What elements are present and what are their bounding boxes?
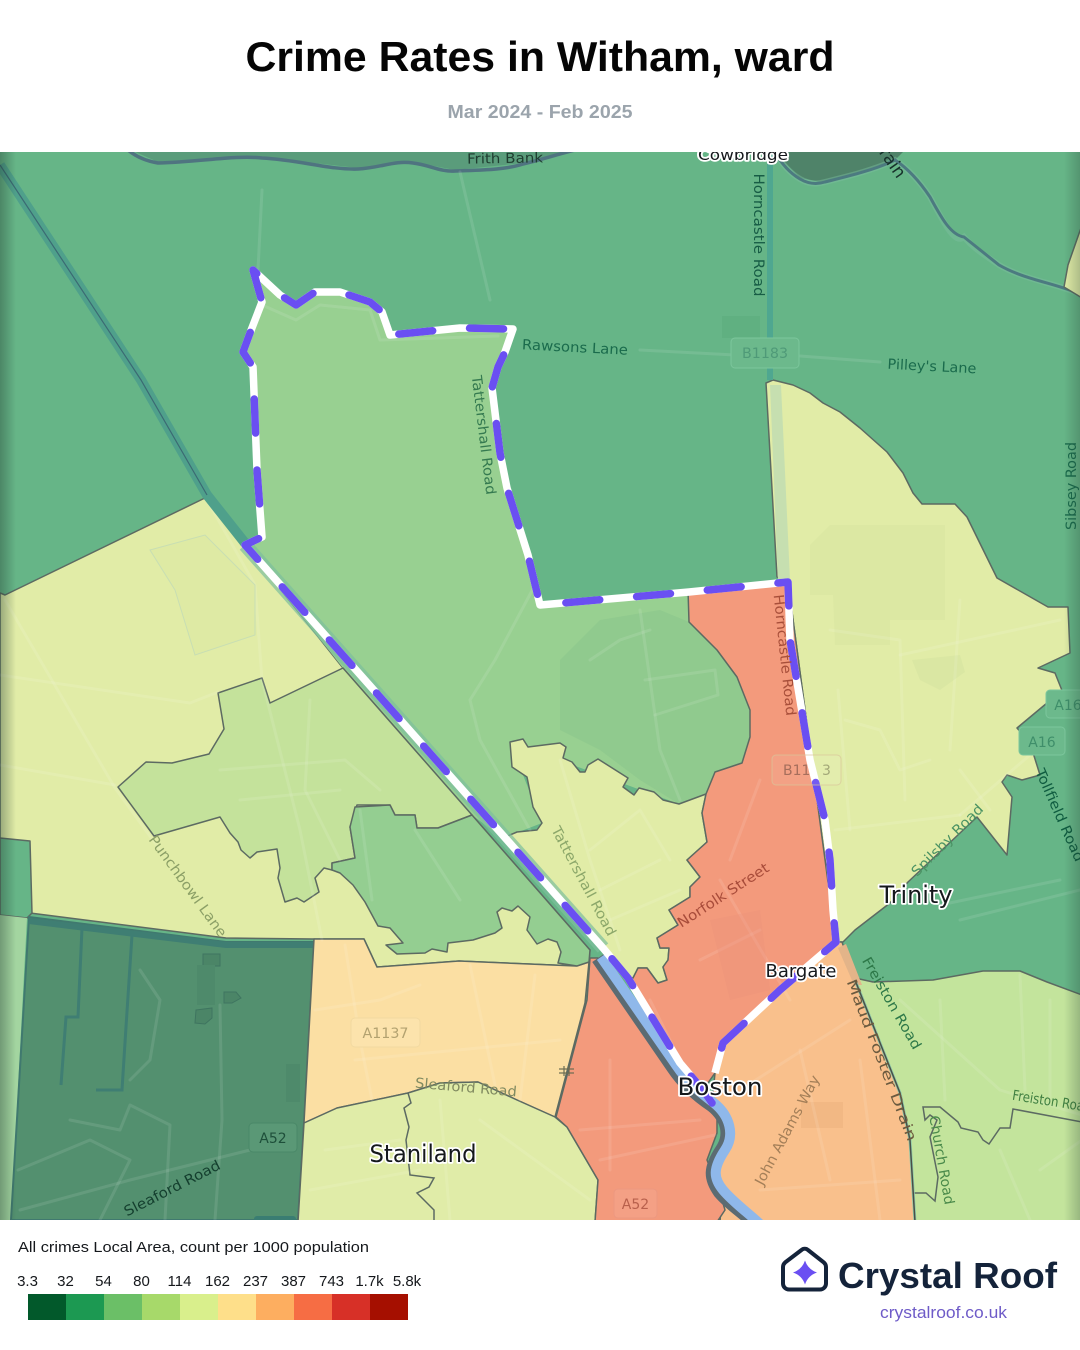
shield: A16 partial xyxy=(1046,690,1080,718)
icon: crystal roof house logo xyxy=(783,1249,826,1290)
label: Sleaford Road dark: Sleaford Road xyxy=(122,1158,223,1220)
area: east yellow Trinity zone xyxy=(766,380,1070,942)
road labels xyxy=(122,144,1080,1220)
shield: A1137 xyxy=(351,1018,420,1047)
area: far-left light green strip xyxy=(0,915,27,1220)
brand block xyxy=(783,1249,1058,1322)
river Witham xyxy=(598,957,760,1226)
area: west green box xyxy=(0,838,32,918)
label: Maud Foster Drain: Maud Foster Drain xyxy=(843,977,919,1144)
shield: B1183 north xyxy=(731,338,799,368)
place label: Bargate: Bargate xyxy=(766,961,836,982)
label: Freiston Road: Freiston Road xyxy=(858,954,924,1053)
area: lowest-crime dark green zone xyxy=(11,917,314,1222)
label: Church Road: Church Road xyxy=(925,1114,957,1206)
railway line north-west xyxy=(0,152,770,543)
legend scale labels xyxy=(17,1273,422,1290)
label: Horncastle Road north: Horncastle Road xyxy=(750,174,766,296)
area: peach zone A1137 xyxy=(304,939,589,1123)
area: south-east light green zone xyxy=(855,971,1080,1222)
shield: A52 dark: A52 xyxy=(259,1131,287,1147)
area: red zone south-west of river xyxy=(556,958,725,1222)
legend colour scale xyxy=(28,1294,408,1320)
area: Staniland yellow zone xyxy=(298,1082,598,1222)
place label: Staniland: Staniland xyxy=(370,1140,476,1168)
place label: Trinity: Trinity xyxy=(879,881,952,909)
shield: A16 xyxy=(1019,727,1065,755)
legend title: All crimes Local Area, count per 1000 population xyxy=(18,1239,369,1256)
shield: A16: A16 xyxy=(1028,735,1056,751)
ward boundary: Witham xyxy=(243,270,836,1103)
label: Cowbridge: Cowbridge xyxy=(698,146,788,164)
legend scale labels: 1.7k xyxy=(355,1273,384,1290)
shield: B1183 south xyxy=(772,755,841,785)
label: Pilley's Lane: Pilley's Lane xyxy=(887,357,977,377)
label: Spilsby Road: Spilsby Road xyxy=(908,801,987,880)
map edge shading xyxy=(0,152,1080,1220)
label: drain fragment: rain xyxy=(874,144,910,182)
shield: B1183 north: B1183 xyxy=(742,346,788,362)
shield: A52 red xyxy=(614,1189,657,1218)
area: orange zone xyxy=(712,942,915,1222)
shield: B1183 south: B11 xyxy=(783,763,810,779)
legend scale labels: 80 xyxy=(133,1273,150,1290)
label: Sleaford Road peach: Sleaford Road xyxy=(414,1076,517,1100)
area: west light-green neighbourhood xyxy=(118,668,472,902)
label: Horncastle Road south: Horncastle Road xyxy=(770,594,798,717)
label: Sibsey Road: Sibsey Road xyxy=(1064,442,1080,530)
area: north-east yellow corner xyxy=(1064,225,1080,298)
area: inner green neighbourhood xyxy=(332,805,590,966)
subtitle: date range: Mar 2024 - Feb 2025 xyxy=(448,102,632,122)
legend scale labels: 32 xyxy=(57,1273,74,1290)
shield: A52 red: A52 xyxy=(622,1197,649,1213)
label: Tattershall Road north: Tattershall Road xyxy=(468,374,498,496)
area: dark water-side zones at top xyxy=(128,150,1080,294)
label: Punchbowl Lane: Punchbowl Lane xyxy=(145,833,230,941)
title: Crime Rates in Witham, ward xyxy=(246,33,834,80)
shield: A1137: A1137 xyxy=(362,1026,408,1042)
railway crossing mark xyxy=(559,1066,574,1076)
legend scale labels: 54 xyxy=(95,1273,112,1290)
map base: low crime green area xyxy=(0,152,1080,1220)
label: Rawsons Lane: Rawsons Lane xyxy=(522,337,628,359)
label: Tattershall Road south: Tattershall Road xyxy=(547,823,619,939)
place label: Boston: Boston xyxy=(678,1073,762,1101)
area: central yellow zone xyxy=(503,739,707,983)
legend scale labels: 114 xyxy=(168,1273,191,1290)
shield: A52 dark xyxy=(249,1123,297,1152)
area: red zone north of river xyxy=(628,582,836,1090)
label: Norfolk Street: Norfolk Street xyxy=(675,860,773,931)
road network xyxy=(0,172,1080,1220)
legend scale labels: 5.8k xyxy=(393,1273,422,1290)
legend scale labels: 3.3 xyxy=(17,1273,38,1290)
label: Frith Bank: Frith Bank xyxy=(467,150,544,168)
area: Witham ward light green xyxy=(243,270,750,838)
brand name: Crystal Roof xyxy=(838,1255,1058,1296)
legend xyxy=(17,1239,422,1320)
area: west yellow zone xyxy=(0,497,590,967)
legend scale labels: 162 xyxy=(205,1273,230,1290)
road shields xyxy=(249,338,1080,1218)
shield: B1183 south: 3 xyxy=(822,763,831,779)
legend scale labels: 237 xyxy=(243,1273,268,1290)
legend scale labels: 743 xyxy=(319,1273,344,1290)
brand url: crystalroof.co.uk xyxy=(880,1304,1008,1322)
label: John Adams Way: John Adams Way xyxy=(752,1073,824,1189)
legend scale labels: 387 xyxy=(281,1273,306,1290)
